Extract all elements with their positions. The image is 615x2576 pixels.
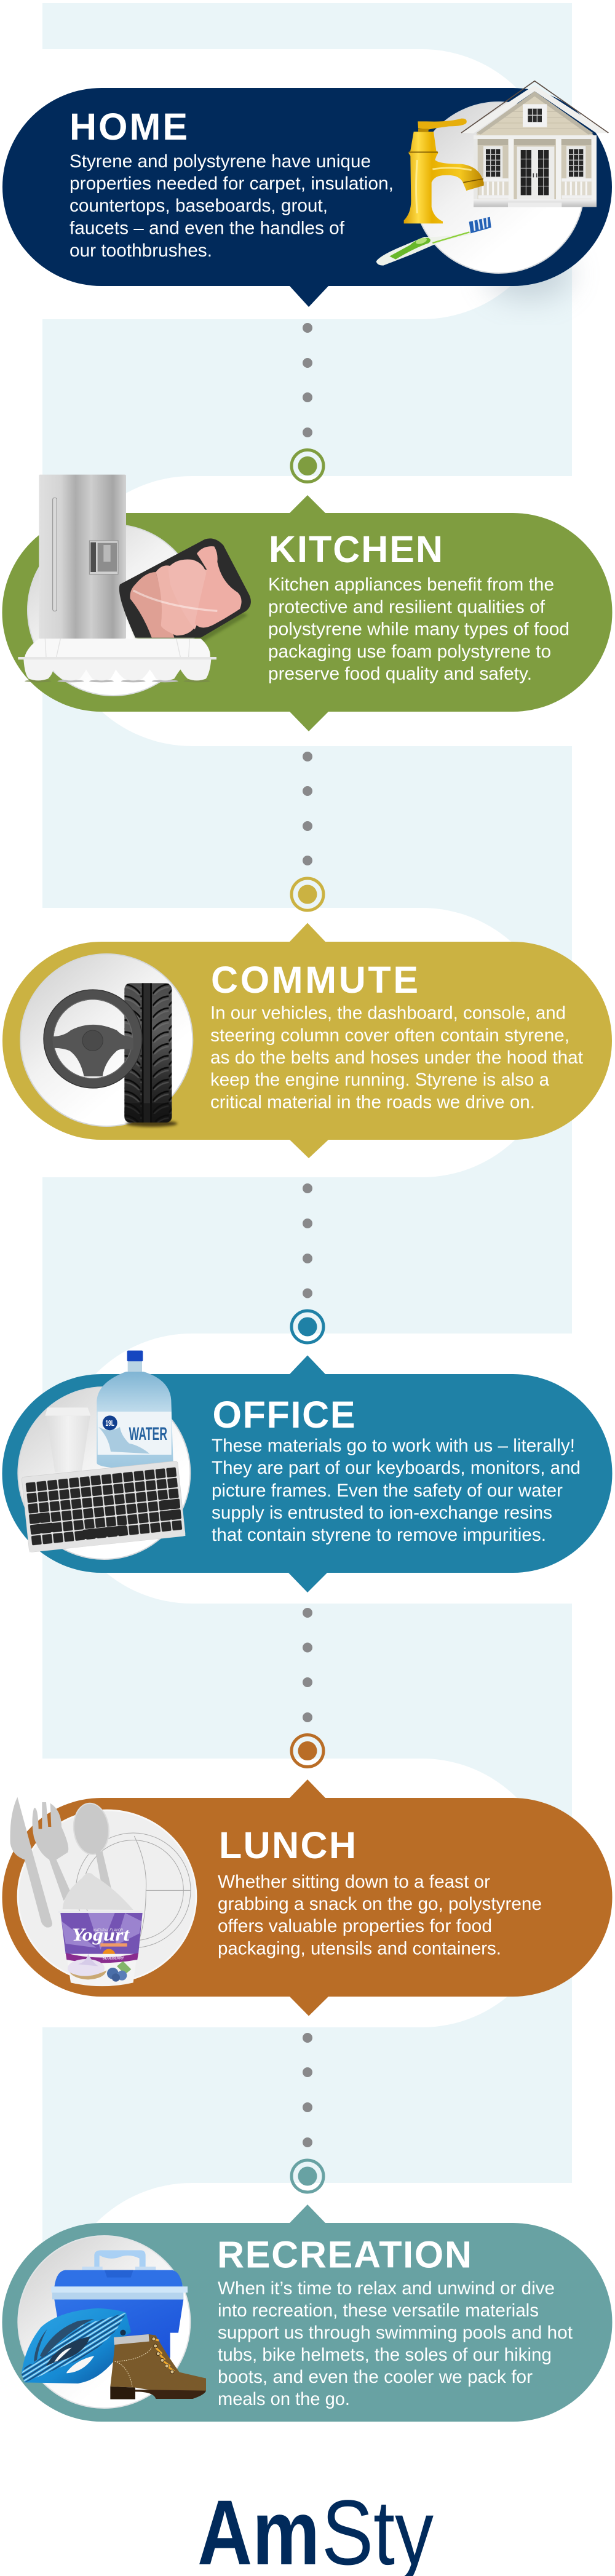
icon: white cup [45,1407,90,1472]
body text: home: faucets – and even the handles of [69,218,345,239]
body text: home [69,151,394,261]
body text: kitchen: preserve food quality and safety. [268,664,532,684]
body text: home: properties needed for carpet, insulation, [69,173,394,194]
icon: tire [124,983,177,1127]
body text: commute: steering column cover often contain styrene, [210,1025,569,1046]
icon: fridge, meat tray and egg carton on plate [18,475,251,696]
icon: water bottle, cup and keyboard on plate [18,1351,190,1559]
panel: recreation [2,2204,612,2422]
icon: cooler, helmet and boot on plate [18,2236,206,2408]
body text: recreation: tubs, bike helmets, the soles of our hiking [218,2345,552,2365]
body text: commute: keep the engine running. Styrene is also a [210,1070,549,1090]
icon: steering wheel [44,990,142,1088]
body text: office [212,1436,581,1545]
icon: yogurt cup [58,1873,143,1986]
timeline connector: kitchen to commute [292,752,323,910]
body text: kitchen: Kitchen appliances benefit from the [268,574,554,595]
icon: bike helmet [22,2308,131,2383]
panel: kitchen [2,475,612,731]
icon: yogurt cup: BLUEBERRY [103,1955,124,1960]
body text: recreation: boots, and even the cooler we pack for [218,2367,533,2387]
body text: home: our toothbrushes. [69,241,212,261]
body text: office: picture frames. Even the safety of our water [212,1481,563,1501]
logo: AmSty [197,2481,434,2576]
body text: office: that contain styrene to remove impurities. [212,1525,546,1545]
body text: kitchen: polystyrene while many types of food [268,619,569,640]
body text: home: countertops, baseboards, grout, [69,196,328,216]
timeline connector: home to kitchen [292,323,323,482]
icon: house, faucet and toothbrush on plate [376,81,608,273]
icon: blue cooler [51,2250,188,2358]
icon: steering wheel and tire on plate [20,954,192,1127]
icon: refrigerator [39,475,126,638]
body text: recreation: into recreation, these versatile materials [218,2300,539,2321]
heading: commute: COMMUTE [211,959,418,1001]
icon: plate rings [76,1833,191,1948]
body text: recreation: support us through swimming pools and hot [218,2323,573,2343]
heading: lunch: LUNCH [219,1824,356,1866]
body text: commute: In our vehicles, the dashboard, console, and [210,1003,566,1024]
icon: house [461,81,608,207]
icon: water bottle [97,1351,173,1469]
body text: commute: as do the belts and hoses under the hood that [210,1047,584,1068]
body text: kitchen: packaging use foam polystyrene to [268,642,551,662]
icon: knife, fork and spoon [10,1797,112,1928]
panel: home [2,81,612,307]
heading: kitchen: KITCHEN [269,528,443,570]
icon: yogurt cup: Yogurt [72,1925,130,1945]
body text: office: They are part of our keyboards, monitors, and [212,1458,581,1478]
heading: office: OFFICE [213,1394,355,1436]
body text: lunch: packaging, utensils and containers. [218,1939,501,1958]
body text: recreation: meals on the go. [218,2389,350,2409]
body text: home: Styrene and polystyrene have unique [69,151,371,172]
body text: recreation [218,2278,573,2409]
body text: commute: critical material in the roads we drive on. [210,1092,535,1112]
icon: hiking boot [110,2334,206,2399]
timeline connector: commute to office [292,1183,323,1343]
body text: office: These materials go to work with us – literally! [212,1436,575,1456]
body text: commute [210,1003,584,1112]
panel: office [2,1351,612,1592]
body text: lunch: Whether sitting down to a feast or [218,1872,490,1892]
heading: home: HOME [69,106,188,148]
panel: commute [2,923,612,1158]
icon: gold faucet [404,119,484,223]
body text: lunch [218,1872,542,1958]
icon: plate, cutlery and yogurt cup [10,1797,196,1986]
icon: meat tray [119,538,251,642]
body text: office: supply is entrusted to ion-exchange resins [212,1503,552,1523]
icon: toothbrush [376,217,491,266]
icon: water bottle: 19L [105,1419,114,1428]
body text: lunch: grabbing a snack on the go, polystyrene [218,1894,542,1914]
panel: lunch [2,1779,612,2016]
body text: kitchen: protective and resilient qualities of [268,597,546,617]
body text: lunch: offers valuable properties for food [218,1916,492,1936]
body text: recreation: When it’s time to relax and unwind or dive [218,2278,555,2299]
timeline connector: lunch to recreation [292,2033,323,2192]
heading: recreation: RECREATION [217,2234,472,2276]
icon: egg carton [18,638,216,682]
icon: water bottle: WATER [129,1424,167,1444]
icon: keyboard [22,1461,185,1552]
timeline connector: office to lunch [292,1608,323,1767]
icon: yogurt cup: NATURAL FLAVOR [93,1928,123,1933]
body text: kitchen [268,574,569,684]
